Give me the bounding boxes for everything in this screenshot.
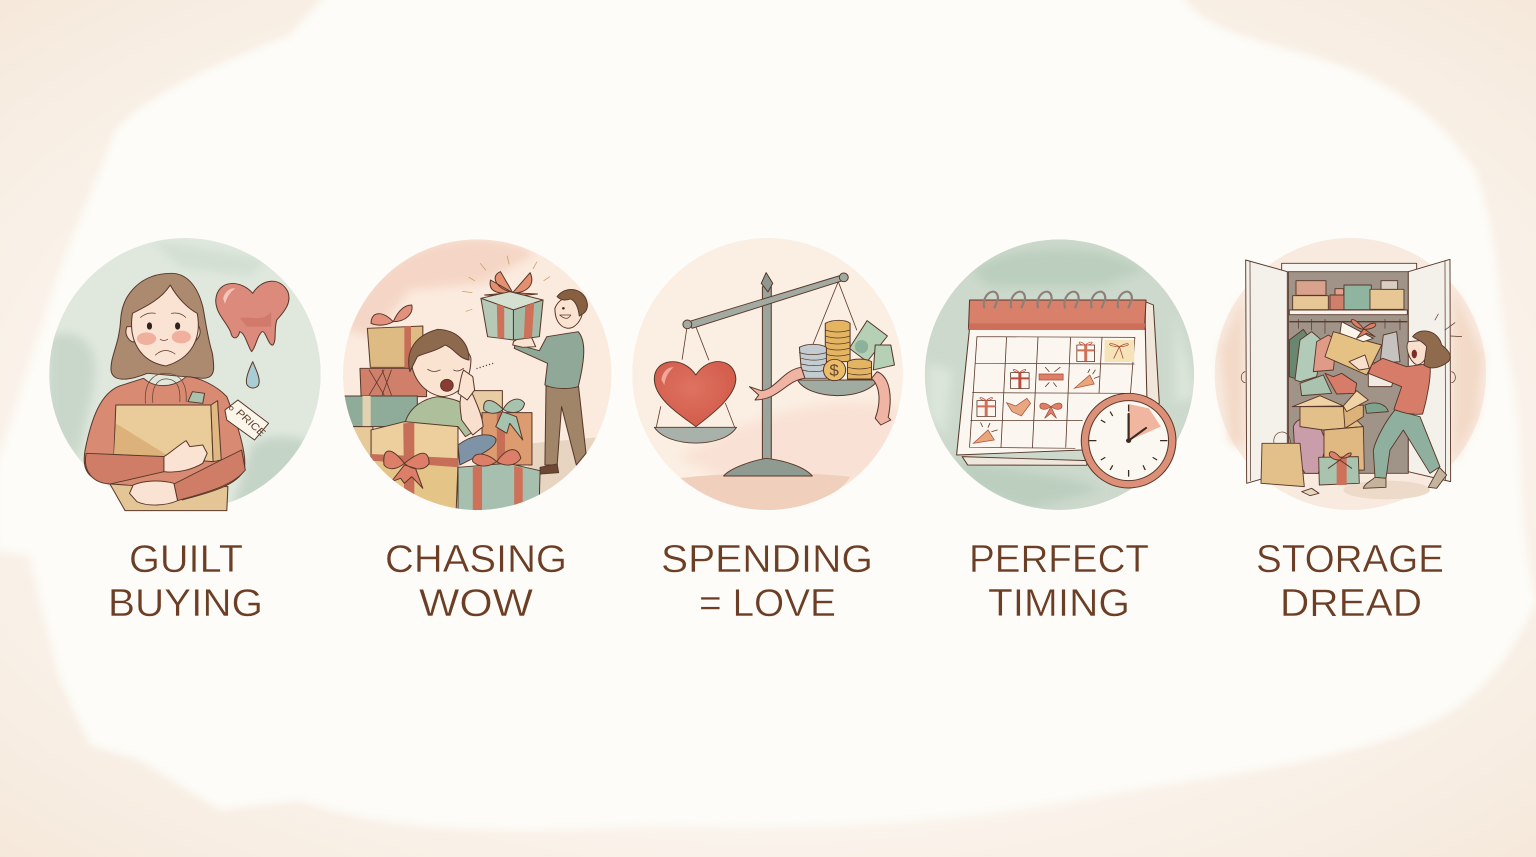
icon: spending equals love bbox=[632, 238, 903, 512]
label: spending equals love bbox=[661, 538, 873, 625]
calendar sticker icons bbox=[973, 340, 1134, 443]
icon: guilt buying bbox=[47, 238, 321, 511]
calendar bbox=[957, 292, 1159, 465]
label: spending equals love: = LOVE bbox=[699, 582, 836, 625]
label: guilt buying: BUYING bbox=[108, 582, 263, 625]
icon: perfect timing bbox=[925, 239, 1197, 510]
label: guilt buying: GUILT bbox=[129, 538, 243, 581]
price tag bbox=[225, 400, 269, 440]
red heart bbox=[654, 362, 736, 427]
hanging clothes bbox=[1289, 319, 1400, 413]
label: chasing wow: WOW bbox=[419, 582, 534, 625]
front gifts bbox=[371, 422, 540, 512]
label: storage dread bbox=[1256, 538, 1444, 625]
balance scale bbox=[654, 273, 878, 476]
coins and cash bbox=[799, 320, 894, 381]
label: storage dread: STORAGE bbox=[1256, 538, 1444, 581]
circle background: sage bbox=[47, 238, 321, 510]
shelf boxes bbox=[1293, 281, 1404, 310]
label: guilt buying bbox=[108, 538, 263, 625]
bored child yawning bbox=[405, 329, 496, 465]
label: chasing wow bbox=[385, 538, 567, 625]
label: perfect timing bbox=[969, 538, 1149, 625]
label: spending equals love: SPENDING bbox=[661, 538, 873, 581]
icon: chasing wow bbox=[341, 238, 611, 512]
price tag: PRICE bbox=[233, 408, 268, 439]
shopping bag bbox=[114, 373, 221, 462]
gift pile bbox=[341, 305, 532, 465]
calendar binder rings bbox=[984, 292, 1132, 308]
circle background: peach bbox=[1215, 238, 1486, 510]
clock bbox=[1081, 393, 1176, 488]
man holding gift bbox=[462, 256, 587, 474]
circle background: peach bbox=[632, 238, 903, 512]
circle background: peach bbox=[343, 238, 611, 510]
arms and hands bbox=[85, 441, 245, 505]
melting heart and teardrop bbox=[216, 281, 289, 388]
closet bbox=[1241, 259, 1455, 483]
woman bbox=[84, 273, 245, 511]
label: storage dread: DREAD bbox=[1280, 582, 1422, 625]
label: perfect timing: TIMING bbox=[988, 582, 1130, 625]
ribbon bbox=[749, 367, 891, 425]
calendar grid bbox=[970, 337, 1135, 448]
label: perfect timing: PERFECT bbox=[969, 538, 1149, 581]
label: chasing wow: CHASING bbox=[385, 538, 567, 581]
icon: storage dread bbox=[1215, 238, 1486, 510]
circle background: sage bbox=[925, 239, 1197, 510]
pile of boxes and bags bbox=[1261, 373, 1368, 496]
coins and cash: $ bbox=[829, 362, 839, 379]
person with falling box bbox=[1325, 314, 1462, 488]
